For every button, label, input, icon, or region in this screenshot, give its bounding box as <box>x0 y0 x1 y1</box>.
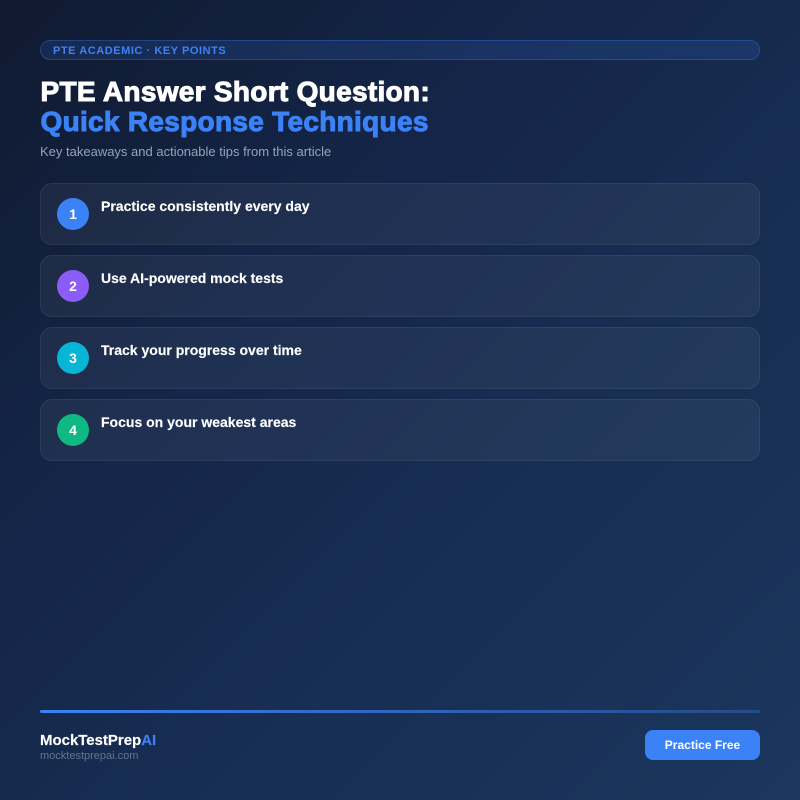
number badge 1: 1 <box>69 206 77 222</box>
brand logo: MockTestPrepAI <box>40 732 156 749</box>
panel: key point 4 <box>40 399 760 461</box>
badge: PTE Academic key points <box>40 40 760 60</box>
number badge 4 <box>57 414 89 446</box>
website address: mocktestprepai.com <box>40 750 138 762</box>
number badge 4: 4 <box>69 422 77 438</box>
title: Quick Response Techniques <box>40 106 429 137</box>
key point 1 text: Practice consistently every day <box>101 198 310 214</box>
number badge 3: 3 <box>69 350 77 366</box>
key point 4 text: Focus on your weakest areas <box>101 414 296 430</box>
call-to-action button: Practice Free <box>665 738 740 752</box>
panel: key point 1 <box>40 183 760 245</box>
subtitle: Key takeaways and actionable tips from this article <box>40 144 331 159</box>
number badge 3 <box>57 342 89 374</box>
number badge 2: 2 <box>69 278 77 294</box>
key point 3 text: Track your progress over time <box>101 342 302 358</box>
title <box>40 76 430 138</box>
number badge 2 <box>57 270 89 302</box>
call-to-action button <box>645 730 760 760</box>
key point 2 text: Use AI-powered mock tests <box>101 270 283 286</box>
badge: PTE Academic key points: PTE ACADEMIC · KEY POINTS <box>53 45 226 57</box>
title: PTE Answer Short Question: <box>40 76 430 107</box>
panel: key point 3 <box>40 327 760 389</box>
panel: key point 2 <box>40 255 760 317</box>
number badge 1 <box>57 198 89 230</box>
